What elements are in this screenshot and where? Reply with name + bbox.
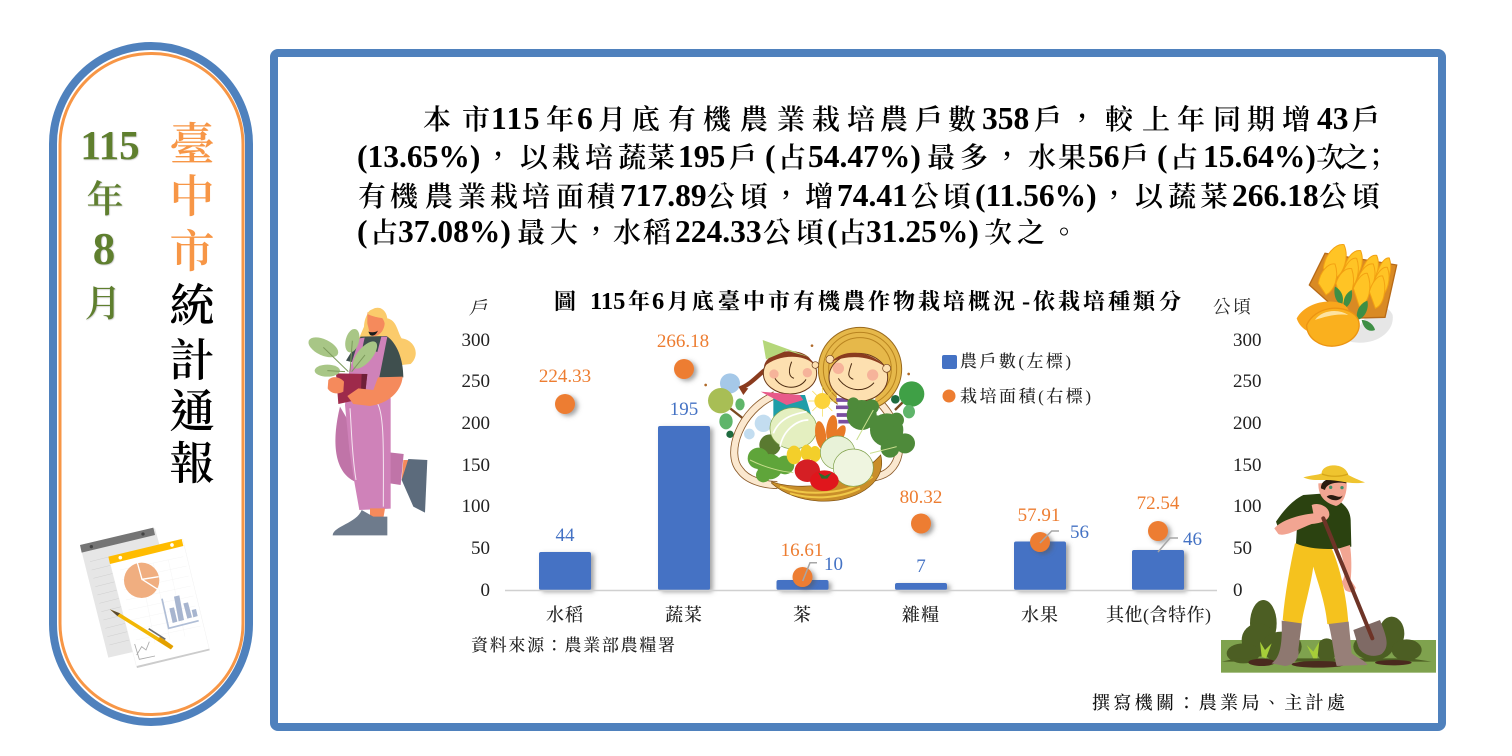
summary paragraph: 戶，較上年同期增 (1034, 104, 1310, 136)
source note: 資料來源：農業部農糧署 (471, 636, 675, 655)
summary paragraph: 占 (1170, 142, 1198, 174)
date label: 115年8月 (80, 122, 140, 325)
summary paragraph: 公頃 (763, 217, 825, 249)
chart title: 6 (652, 288, 664, 315)
legend: 農戶數(左標) (960, 352, 1071, 371)
legend (942, 352, 1091, 406)
date label: 115年8月: 月 (84, 284, 122, 325)
right axis: 0 (1233, 580, 1242, 601)
summary paragraph: ( (357, 214, 368, 249)
icon: children with vegetable basket (704, 327, 924, 501)
summary paragraph: (13.65%) (357, 139, 480, 174)
summary paragraph: ( (827, 214, 838, 249)
summary paragraph: ，以蔬菜 (1100, 181, 1228, 213)
summary paragraph: 本市 (423, 104, 490, 136)
vertical title: 臺中市統計通報 (169, 120, 216, 489)
category labels: 蔬菜 (665, 605, 703, 625)
summary paragraph: 有機農業栽培面積 (358, 181, 618, 213)
area value labels (539, 331, 1180, 561)
summary paragraph: 公頃 (911, 181, 972, 213)
summary paragraph: (11.56%) (975, 178, 1097, 213)
left axis: 戶 (469, 298, 488, 318)
author note: 撰寫機關：農業局、主計處 (1092, 693, 1345, 713)
right axis: 200 (1233, 413, 1262, 434)
date label: 115年8月: 8 (93, 224, 115, 274)
chart title: 圖 (554, 289, 576, 314)
summary paragraph (357, 101, 1390, 249)
icon: woman holding potted plant (305, 308, 427, 535)
summary paragraph: 戶 (1121, 142, 1149, 174)
summary paragraph: 74.41 (837, 178, 908, 213)
summary paragraph: 266.18 (1232, 178, 1319, 213)
summary paragraph: 717.89 (620, 178, 707, 213)
summary paragraph: 公頃 (1319, 181, 1381, 213)
chart title: - (1022, 288, 1030, 315)
right axis: 公頃 (1213, 297, 1253, 317)
vertical title: 臺中市統計通報: 中 (169, 172, 215, 222)
summary paragraph: 年 (546, 104, 574, 136)
bars: households (539, 426, 1184, 590)
chart title: 月底臺中市有機農作物栽培概況 (667, 289, 1015, 314)
household value labels: 56 (1070, 522, 1089, 543)
chart title: 依栽培種類分 (1033, 289, 1181, 314)
left axis: 50 (471, 538, 490, 559)
left axis: 200 (462, 413, 490, 434)
household value labels (556, 399, 1202, 577)
summary paragraph: 占 (778, 142, 806, 174)
summary paragraph: 戶 (729, 142, 757, 174)
vertical title: 臺中市統計通報: 統 (169, 281, 216, 331)
summary paragraph: 6 (577, 101, 593, 136)
summary paragraph: 戶 (1352, 104, 1380, 136)
leader lines (803, 531, 1178, 581)
household value labels: 195 (670, 399, 698, 420)
right axis: 300 (1233, 330, 1262, 351)
vertical title: 臺中市統計通報: 計 (169, 336, 215, 386)
legend: 栽培面積(右標) (960, 387, 1091, 406)
summary paragraph: 公頃，增 (707, 181, 833, 213)
right axis (1213, 297, 1262, 601)
area value labels: 16.61 (781, 540, 823, 561)
summary paragraph: 115 (491, 101, 541, 136)
category labels: 雜糧 (902, 605, 940, 625)
date label: 115年8月: 年 (86, 179, 124, 221)
summary paragraph: 次之。 (984, 217, 1078, 249)
category labels (546, 605, 1211, 626)
area value labels: 224.33 (539, 366, 591, 387)
category labels: 水稻 (546, 605, 584, 625)
summary paragraph: 最大，水稻 (517, 217, 671, 249)
area value labels: 72.54 (1137, 493, 1180, 514)
category labels: 茶 (793, 605, 812, 625)
household value labels: 44 (556, 525, 575, 546)
left axis: 300 (462, 330, 490, 351)
summary paragraph: 最多，水果 (927, 142, 1086, 174)
date label: 115年8月: 115 (80, 122, 140, 168)
markers: cultivated area (555, 359, 1168, 587)
area value labels: 57.91 (1018, 505, 1060, 526)
summary paragraph: 占 (370, 217, 398, 249)
left axis: 100 (462, 496, 490, 517)
vertical title: 臺中市統計通報: 臺 (169, 120, 215, 170)
summary paragraph: 占 (838, 217, 866, 249)
category labels: 其他(含特作) (1106, 605, 1211, 626)
summary paragraph: 54.47%) (808, 139, 921, 174)
household value labels: 7 (916, 556, 926, 577)
left axis (462, 298, 490, 601)
left axis: 0 (480, 580, 490, 601)
summary paragraph: ( (765, 139, 776, 174)
summary paragraph: 15.64%) (1203, 139, 1316, 174)
chart title: 115 (590, 288, 625, 315)
summary paragraph: 358 (982, 101, 1029, 136)
left axis: 150 (462, 455, 490, 476)
right axis: 100 (1233, 496, 1262, 517)
chart title: 年 (628, 289, 650, 314)
chart: organic crops, households and area (462, 288, 1262, 626)
vertical title: 臺中市統計通報: 市 (169, 227, 215, 277)
category labels: 水果 (1021, 605, 1059, 625)
summary paragraph: 31.25%) (866, 214, 979, 249)
left axis: 250 (462, 371, 490, 392)
panel: left title pill (53, 46, 249, 722)
area value labels: 80.32 (900, 487, 942, 508)
summary paragraph: 195 (678, 139, 725, 174)
summary paragraph: 56 (1088, 139, 1120, 174)
household value labels: 46 (1183, 529, 1202, 550)
panel: main content frame (274, 53, 1442, 727)
summary paragraph: 月底有機農業栽培農戶數 (598, 104, 976, 136)
summary paragraph: 43 (1317, 101, 1348, 136)
summary paragraph: 次之； (1316, 142, 1390, 174)
right axis: 50 (1233, 538, 1252, 559)
summary paragraph: ( (1157, 139, 1168, 174)
vertical title: 臺中市統計通報: 報 (169, 439, 215, 489)
summary paragraph: 224.33 (675, 214, 762, 249)
right axis: 250 (1233, 371, 1262, 392)
icon: farmer digging with shovel (1221, 465, 1436, 673)
right axis: 150 (1233, 455, 1262, 476)
area value labels: 266.18 (657, 331, 709, 352)
icon: report sheets with charts and pencil (80, 528, 210, 668)
household value labels: 10 (824, 554, 843, 575)
vertical title: 臺中市統計通報: 通 (169, 387, 215, 437)
summary paragraph: 37.08%) (398, 214, 511, 249)
summary paragraph: ，以栽培蔬菜 (484, 142, 675, 174)
icon: basket of mangoes (1297, 245, 1397, 346)
